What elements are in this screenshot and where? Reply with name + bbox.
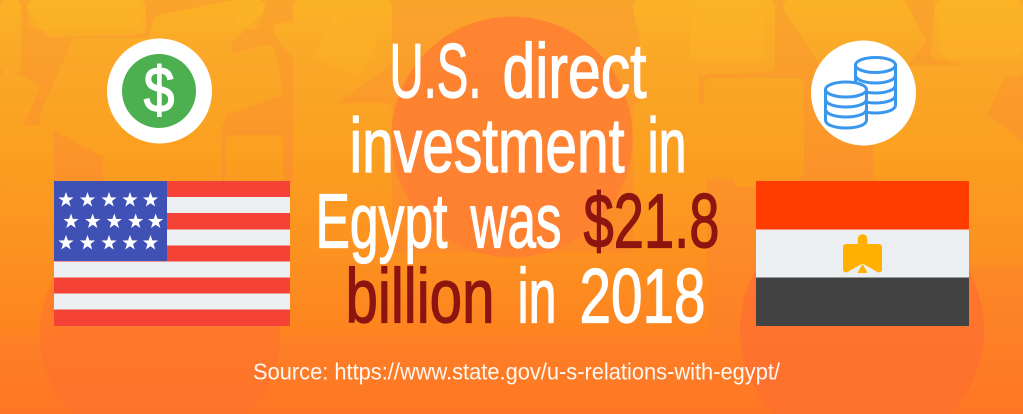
title: direct — [502, 28, 646, 114]
title: U.S. — [390, 28, 482, 114]
title: was — [470, 178, 562, 264]
icon: dollar coin: $ — [144, 54, 174, 126]
icon: U.S. flag — [54, 181, 290, 326]
title: investment — [350, 103, 624, 189]
source: Source: https://www.state.gov/u-s-relations-with-egypt/ — [253, 358, 781, 384]
icon: eagle — [843, 234, 882, 273]
icon: dollar coin — [107, 38, 212, 144]
icon: Egypt flag — [756, 181, 969, 326]
title: in — [648, 103, 686, 189]
title — [316, 28, 720, 340]
title: in — [518, 254, 556, 340]
icon: coin stacks — [811, 40, 916, 146]
title: billion — [346, 254, 494, 340]
title: Egypt — [316, 178, 448, 264]
title: 2018 — [580, 254, 706, 340]
title: $21.8 — [584, 178, 720, 264]
